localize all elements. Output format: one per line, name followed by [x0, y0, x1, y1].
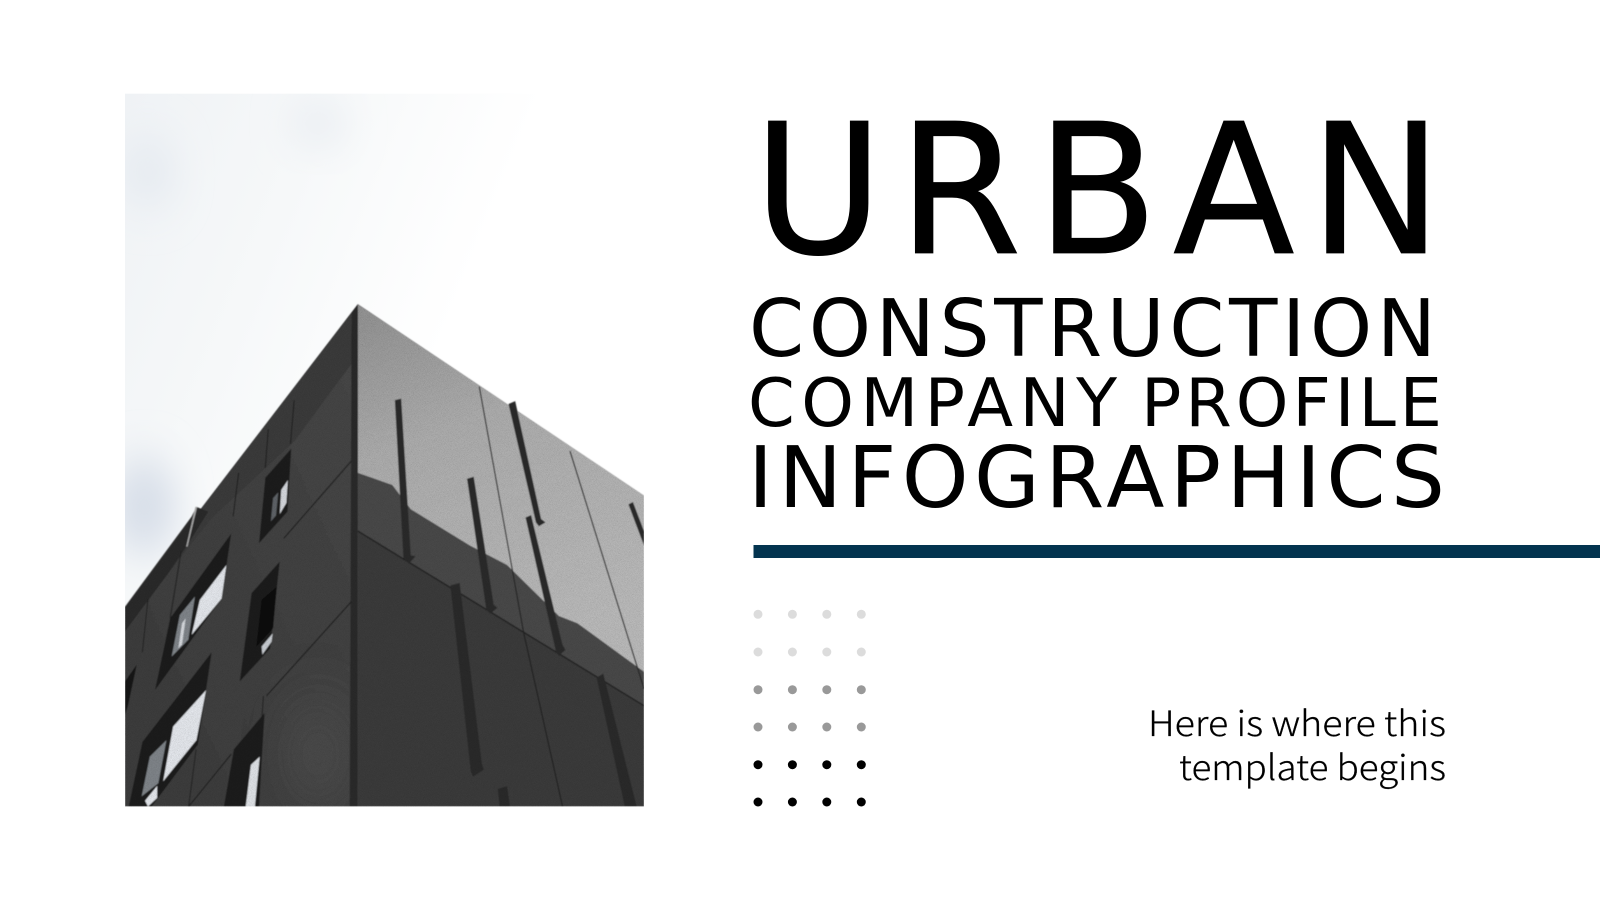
window row 2 — [240, 562, 280, 681]
window row 4 — [129, 652, 212, 807]
window row 3 — [155, 533, 231, 690]
subtitle: Here is where this — [1148, 696, 1446, 747]
dot matrix — [754, 610, 866, 806]
title: URBAN: URBAN — [753, 86, 1443, 296]
title: CONSTRUCTION: CONSTRUCTION — [749, 283, 1436, 375]
title: INFOGRAPHICS: INFOGRAPHICS — [748, 429, 1445, 528]
title: COMPANY PROFILE: PROFILE — [1141, 364, 1442, 442]
title: COMPANY PROFILE: COMPANY — [748, 364, 1118, 442]
subtitle: template begins — [1179, 740, 1446, 791]
divider bar — [754, 545, 1600, 558]
title: COMPANY PROFILE — [748, 364, 1442, 442]
facade fins — [395, 399, 644, 807]
subtitle — [1148, 696, 1446, 791]
photo: concrete building against the sky — [111, 94, 644, 808]
window row 5 — [224, 713, 265, 807]
window row 1 — [259, 449, 291, 543]
